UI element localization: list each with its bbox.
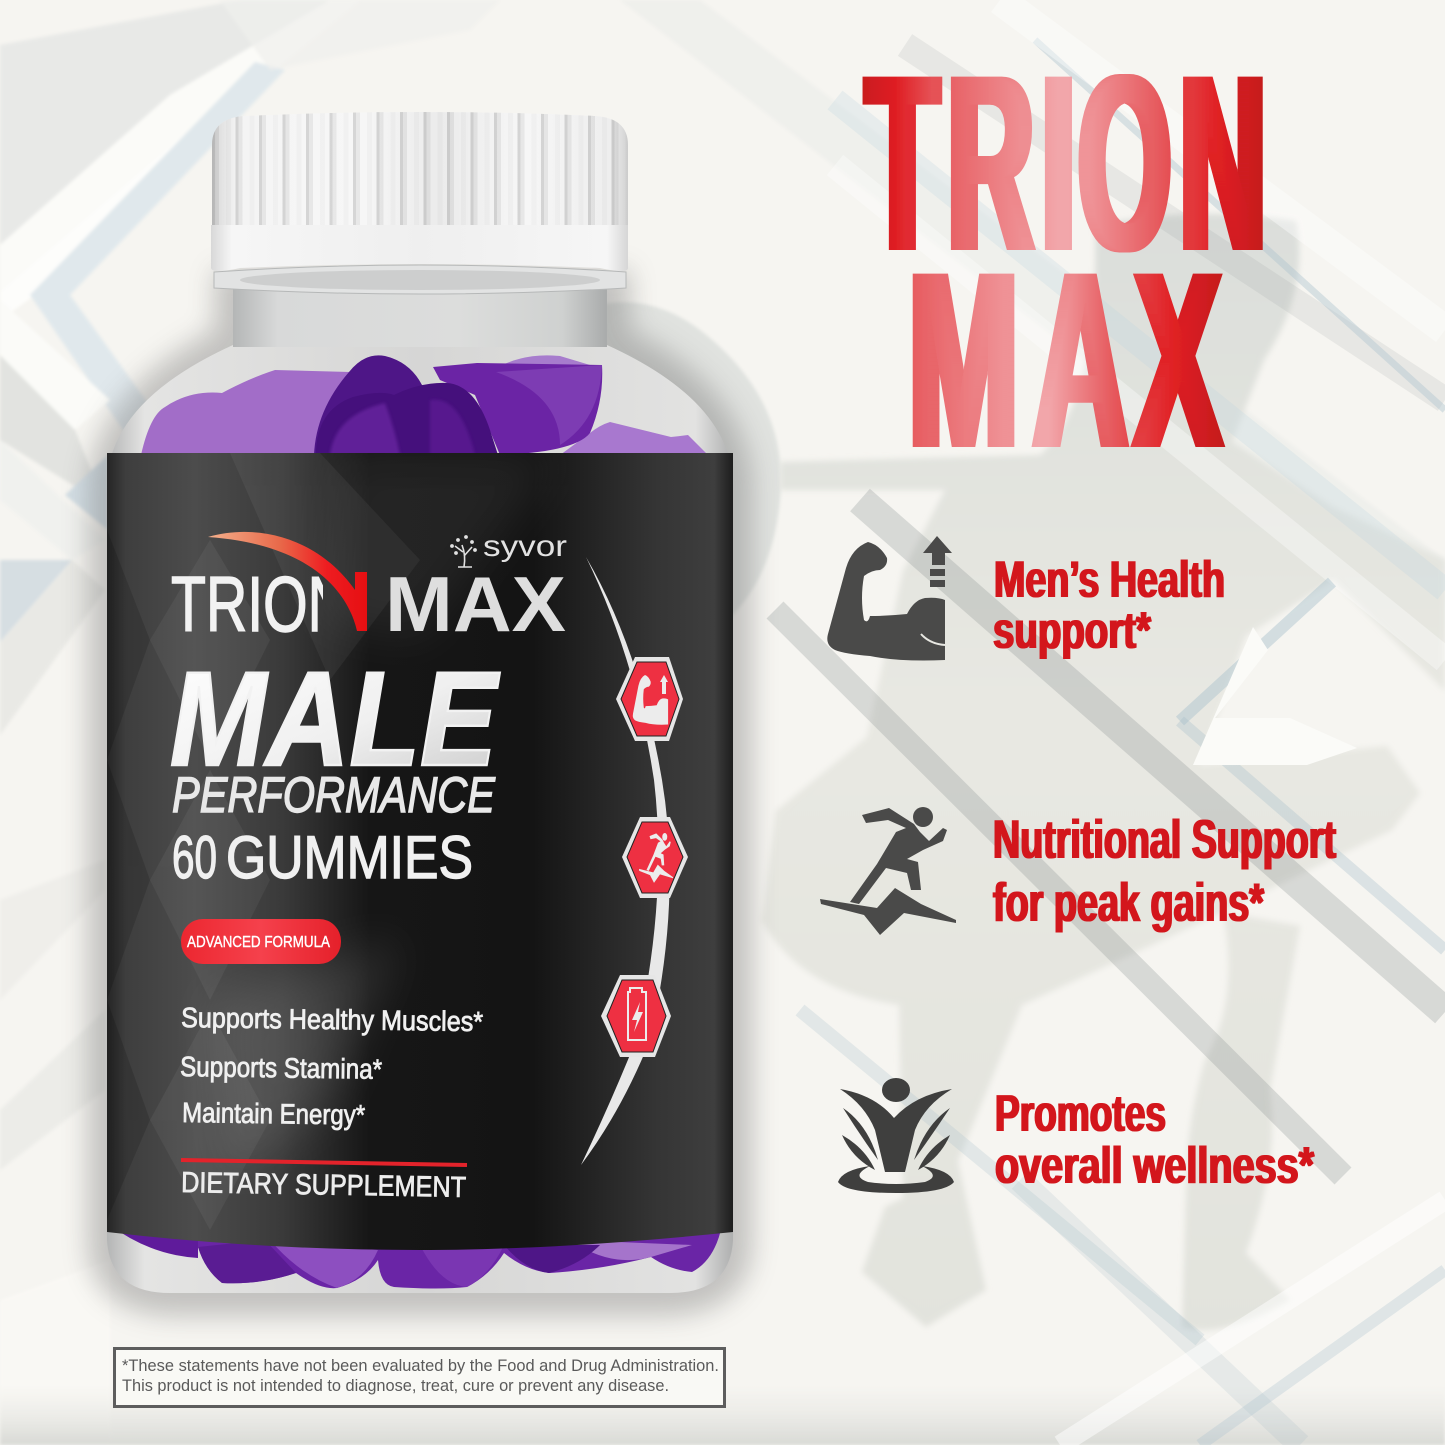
cap ribbed section	[212, 112, 628, 225]
label benefits list: Supports Healthy Muscles*	[181, 1002, 483, 1037]
text	[995, 1085, 1315, 1195]
right side diagonal bands	[775, 0, 1445, 1445]
icon: runner	[820, 807, 956, 935]
icon: flexed muscle arm with arrow	[827, 536, 952, 660]
benefit: nutritional support	[820, 807, 1336, 935]
label text: Trion Max logo: TRION	[171, 560, 349, 648]
text	[993, 808, 1336, 933]
bottle rim	[214, 265, 626, 294]
title	[866, 22, 1266, 501]
label	[107, 453, 733, 1253]
disclaimer box: This product is not intended to diagnose, treat, cure or prevent any disease.	[122, 1376, 669, 1395]
label text: Trion Max logo	[172, 532, 566, 633]
label arc	[581, 557, 670, 1165]
label text: 60 GUMMIES: GUMMIES	[226, 824, 473, 891]
label benefits list: Supports Stamina*	[180, 1051, 382, 1085]
brand: syvor with tree	[451, 530, 567, 567]
glass neck	[233, 275, 607, 347]
glass bottle body	[107, 275, 733, 1293]
badge: advanced formula	[181, 919, 341, 964]
cap shading	[212, 112, 628, 225]
hex icon: battery	[601, 975, 671, 1057]
label sheen	[212, 946, 390, 1159]
gummies bottom	[198, 1233, 720, 1288]
title line 1: TRION: TRION	[866, 22, 1266, 304]
logo swoosh N	[208, 532, 367, 631]
athlete silhouette	[762, 214, 1445, 1330]
icon: figure and leaves	[838, 1078, 954, 1193]
title line 2: MAX: MAX	[909, 219, 1222, 501]
label text: dietary supplement: DIETARY SUPPLEMENT	[181, 1167, 467, 1204]
brand: syvor with tree: syvor	[483, 530, 567, 563]
label diamond pattern	[150, 453, 420, 1230]
bottle shadow	[88, 270, 752, 1316]
hex icon: muscle	[616, 657, 683, 741]
text: overall wellness*	[995, 1137, 1315, 1195]
red divider	[181, 1160, 467, 1165]
hex icon: runner	[622, 817, 688, 898]
label text: MALE: MALE	[170, 645, 500, 794]
white window patch	[1193, 627, 1357, 765]
text: for peak gains*	[993, 871, 1264, 933]
cap band	[211, 225, 628, 271]
disclaimer box: *These statements have not been evaluated by the Food and Drug Administration.	[122, 1356, 719, 1375]
barbell plate	[530, 302, 781, 640]
label text: 60 GUMMIES: 60	[172, 824, 217, 891]
text	[993, 551, 1225, 660]
label text: PERFORMANCE: PERFORMANCE	[172, 767, 496, 823]
gummies top	[110, 355, 722, 1288]
disclaimer box	[114, 1348, 724, 1406]
badge: advanced formula: ADVANCED FORMULA	[187, 934, 330, 951]
benefit: overall wellness	[838, 1078, 1315, 1195]
label benefits list: Maintain Energy*	[182, 1097, 365, 1131]
text: support*	[993, 602, 1152, 660]
product bottle	[88, 112, 752, 1316]
text: Men’s Health	[994, 551, 1225, 609]
benefit: men's health	[827, 536, 1225, 660]
label text: Trion Max logo: MAX	[385, 560, 566, 648]
label benefits list	[180, 1002, 483, 1131]
text: Promotes	[995, 1085, 1166, 1143]
